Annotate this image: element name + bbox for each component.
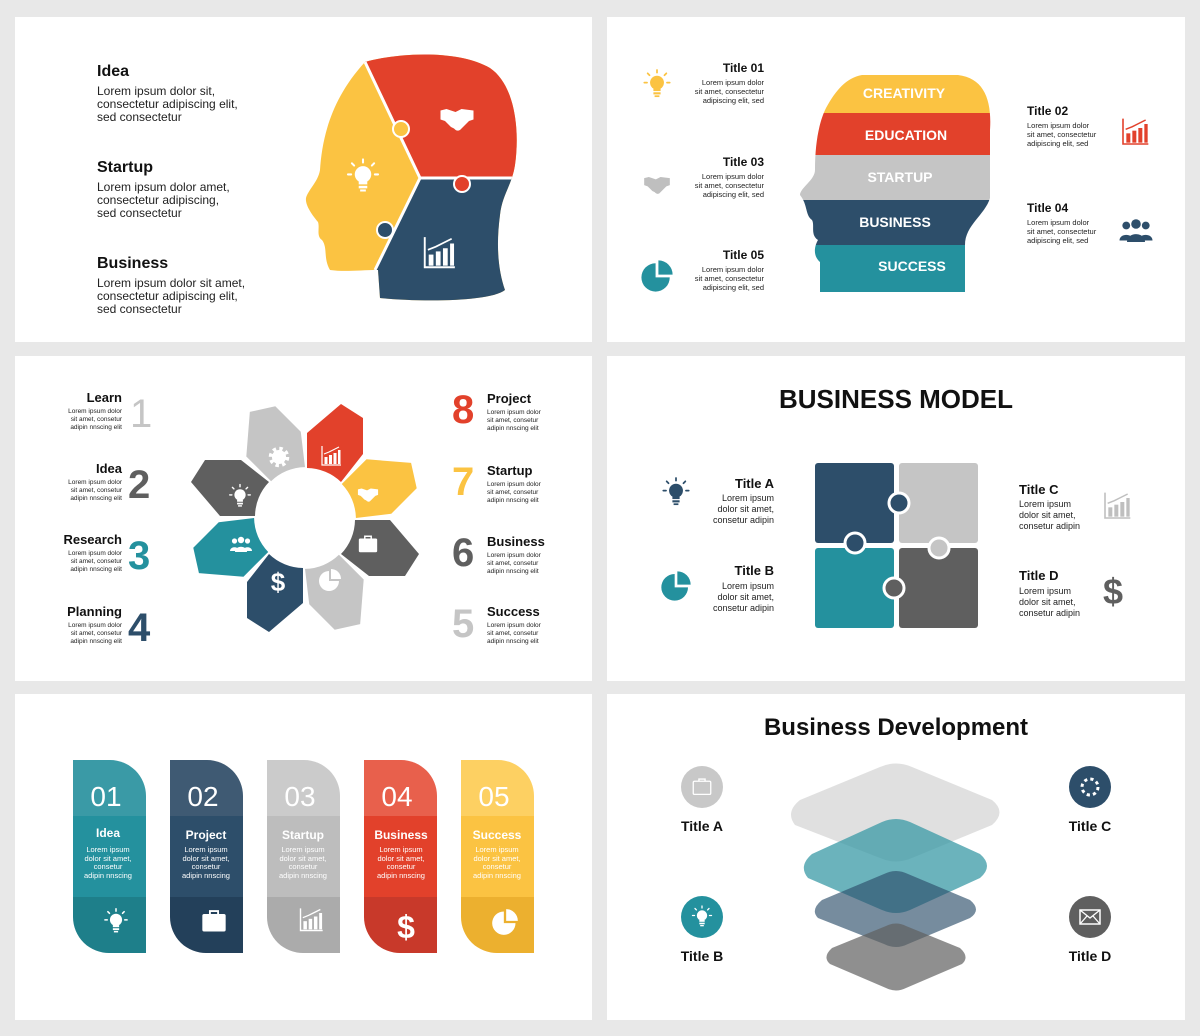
column 04 Business: Business [374, 828, 428, 842]
item: Title 04: adipiscing elit, sed [1027, 236, 1088, 245]
item: Idea 2: Idea [96, 461, 123, 476]
item: Title C: dolor sit amet, [1019, 510, 1076, 520]
item: Title 02: Lorem ipsum dolor [1027, 121, 1090, 130]
item: Research 3: sit amet, consetur [71, 558, 123, 565]
column 04 Business: adipin nnscing [377, 871, 425, 880]
column 03 Startup: adipin nnscing [279, 871, 327, 880]
heading: BUSINESS MODEL: BUSINESS MODEL [779, 384, 1013, 414]
item: Title A: Title A [681, 818, 723, 834]
panel: business development [607, 694, 1185, 1020]
item: Title B [681, 896, 723, 964]
head puzzle graphic [306, 54, 517, 300]
item: Learn 1: 1 [130, 392, 152, 436]
column 04 Business [364, 760, 437, 953]
column 03 Startup: Startup [282, 828, 324, 842]
item: Business 6: Lorem ipsum dolor [487, 552, 542, 559]
head stripes graphic: EDUCATION [865, 127, 947, 143]
item: Research 3: Research [63, 532, 122, 547]
item: Success 5 [452, 602, 542, 646]
icon: chart [425, 237, 455, 267]
column 02 Project: dolor sit amet, [182, 854, 230, 863]
item: Title 05: sit amet, consectetur [695, 274, 764, 283]
panel: gear cycle [15, 356, 592, 681]
item: Title 05: adipiscing elit, sed [703, 283, 764, 292]
layers graphic [791, 764, 1000, 990]
item: Business 6: sit amet, consetur [487, 560, 539, 567]
item: Title B [661, 563, 774, 613]
item: Business 6: adipin nnscing elit [487, 568, 539, 575]
heading: Business Development: Business Development [764, 714, 1028, 741]
item: Research 3: 3 [128, 534, 150, 578]
text block: Idea: consectetur adipiscing elit, [97, 97, 238, 111]
item: Success 5: 5 [452, 602, 474, 646]
item: Success 5: Success [487, 604, 540, 619]
item: Title A: Lorem ipsum [722, 493, 774, 503]
column 02 Project: Lorem ipsum [184, 845, 228, 854]
column 02 Project [170, 760, 243, 953]
item: Title 03 [644, 155, 765, 199]
item: Title 04: Title 04 [1027, 201, 1068, 215]
gear graphic [183, 396, 427, 640]
item: Success 5: Lorem ipsum dolor [487, 622, 542, 629]
item: Planning 4: Planning [67, 604, 122, 619]
column 01 Idea: 01 [90, 781, 122, 812]
text block: Startup: Lorem ipsum dolor amet, [97, 180, 230, 194]
item: Project 8 [452, 388, 542, 432]
column 03 Startup: consetur [289, 862, 318, 871]
item: Learn 1: sit amet, consetur [71, 416, 123, 423]
column 04 Business: dolor sit amet, [377, 854, 425, 863]
column 01 Idea [73, 760, 146, 953]
item: Title 02: sit amet, consectetur [1027, 130, 1097, 139]
item: Idea 2: 2 [128, 463, 150, 507]
item: Project 8: sit amet, consetur [487, 417, 539, 424]
column 01 Idea: adipin nnscing [84, 871, 132, 880]
item: Title A [663, 476, 775, 525]
item: Title A: dolor sit amet, [717, 504, 774, 514]
item: Title 01: sit amet, consectetur [695, 87, 764, 96]
item: Startup 7 [452, 460, 542, 504]
item: Title D: Title D [1019, 568, 1058, 583]
column 01 Idea: dolor sit amet, [84, 854, 132, 863]
icon: handshake [440, 109, 474, 131]
item: Title A: Title A [735, 476, 775, 491]
head stripes graphic: SUCCESS [878, 258, 946, 274]
text block: Idea [97, 63, 238, 124]
item: Title 03: sit amet, consectetur [695, 181, 764, 190]
item: Title 04: Lorem ipsum dolor [1027, 218, 1090, 227]
text block: Idea: sed consectetur [97, 110, 182, 124]
item: Title B: Title B [681, 948, 723, 964]
icon: bulb [348, 159, 378, 192]
item: Success 5: adipin nnscing elit [487, 638, 539, 645]
panel: head stripes [607, 17, 1185, 342]
item: Title 05: Title 05 [723, 248, 764, 262]
item: Startup 7: sit amet, consetur [487, 489, 539, 496]
gear graphic: $ [271, 567, 286, 597]
text block: Startup: consectetur adipiscing, [97, 193, 219, 207]
item: Title A: consetur adipin [713, 515, 774, 525]
item: Title 01: adipiscing elit, sed [703, 96, 764, 105]
column 05 Success: adipin nnscing [473, 871, 521, 880]
item: Learn 1: Learn [87, 390, 122, 405]
column 02 Project: 02 [187, 781, 219, 812]
item: Title 03: adipiscing elit, sed [703, 190, 764, 199]
item: Title 03: Title 03 [723, 155, 764, 169]
text block: Business: Lorem ipsum dolor sit amet, [97, 276, 245, 290]
text block: Startup: sed consectetur [97, 206, 182, 220]
text block: Business: sed consectetur [97, 302, 182, 316]
panel: five columns [15, 694, 592, 1020]
column 03 Startup: 03 [284, 781, 316, 812]
panel: business model [607, 356, 1185, 681]
item: Project 8: Project [487, 391, 532, 406]
item: Title B: consetur adipin [713, 603, 774, 613]
column 03 Startup: dolor sit amet, [279, 854, 327, 863]
item: Title D: consetur adipin [1019, 608, 1080, 618]
column 05 Success: dolor sit amet, [473, 854, 521, 863]
text block: Idea: Idea [97, 63, 129, 80]
item: Title 01: Title 01 [723, 61, 764, 75]
item: Idea 2 [68, 461, 150, 507]
text block: Startup: Startup [97, 159, 153, 176]
item: Idea 2: adipin nnscing elit [70, 495, 122, 502]
item: Learn 1: adipin nnscing elit [70, 424, 122, 431]
item: Title 01 [644, 61, 765, 105]
column 01 Idea: Idea [96, 826, 120, 840]
column 05 Success [461, 760, 534, 953]
item: Title 01: Lorem ipsum dolor [702, 78, 765, 87]
item: Title C: Lorem ipsum [1019, 499, 1071, 509]
text block: Startup [97, 159, 230, 220]
item: Business 6: Business [487, 534, 545, 549]
item: Startup 7: adipin nnscing elit [487, 497, 539, 504]
item: Learn 1: Lorem ipsum dolor [68, 408, 123, 415]
item: Project 8: 8 [452, 388, 474, 432]
item: Title C: Title C [1019, 482, 1059, 497]
item: Idea 2: Lorem ipsum dolor [68, 479, 123, 486]
item: Idea 2: sit amet, consetur [71, 487, 123, 494]
item: Planning 4: 4 [128, 606, 151, 650]
item: Project 8: Lorem ipsum dolor [487, 409, 542, 416]
column 02 Project: Project [186, 828, 226, 842]
item: Research 3: Lorem ipsum dolor [68, 550, 123, 557]
item: Title A [681, 766, 723, 834]
item: Title B: Lorem ipsum [722, 581, 774, 591]
item: Research 3: adipin nnscing elit [70, 566, 122, 573]
text block: Business [97, 255, 245, 316]
item: Research 3 [63, 532, 150, 578]
item: Title 04: sit amet, consectetur [1027, 227, 1097, 236]
item: Title C [1069, 766, 1111, 834]
column 02 Project: adipin nnscing [182, 871, 230, 880]
item: Planning 4 [67, 604, 151, 650]
column 01 Idea: Lorem ipsum [86, 845, 130, 854]
item: Title C: Title C [1069, 818, 1111, 834]
item: Success 5: sit amet, consetur [487, 630, 539, 637]
item: Title 04 [1027, 201, 1152, 245]
column 05 Success: Success [473, 828, 522, 842]
column 01 Idea: consetur [94, 862, 123, 871]
item: Planning 4: sit amet, consetur [71, 630, 123, 637]
column 04 Business: consetur [387, 862, 416, 871]
item: Planning 4: adipin nnscing elit [70, 638, 122, 645]
column 04 Business: $ [397, 909, 415, 945]
item: Business 6 [452, 531, 545, 575]
item: Title C [1019, 482, 1130, 531]
item: Project 8: adipin nnscing elit [487, 425, 539, 432]
item: Title D: dolor sit amet, [1019, 597, 1076, 607]
item: Title 05 [641, 248, 765, 292]
item: Title B: Title B [734, 563, 774, 578]
head stripes graphic: STARTUP [867, 169, 933, 185]
item: Title B: dolor sit amet, [717, 592, 774, 602]
item: Startup 7: 7 [452, 460, 474, 504]
head stripes graphic: BUSINESS [859, 214, 931, 230]
text block: Idea: Lorem ipsum dolor sit, [97, 84, 215, 98]
item: Title D [1069, 896, 1111, 964]
item: Title D: Lorem ipsum [1019, 586, 1071, 596]
item: Learn 1 [68, 390, 152, 436]
column 04 Business: Lorem ipsum [379, 845, 423, 854]
column 05 Success: Lorem ipsum [475, 845, 519, 854]
item: Business 6: 6 [452, 531, 474, 575]
text block: Business: Business [97, 255, 168, 272]
item: Startup 7: Lorem ipsum dolor [487, 481, 542, 488]
column 05 Success: 05 [478, 781, 510, 812]
item: Title 02: Title 02 [1027, 104, 1068, 118]
item: Title 02: adipiscing elit, sed [1027, 139, 1088, 148]
puzzle graphic [815, 463, 978, 628]
column 05 Success: consetur [483, 862, 512, 871]
item: Startup 7: Startup [487, 463, 533, 478]
column 02 Project: consetur [192, 862, 221, 871]
head stripes graphic [795, 70, 995, 295]
column 04 Business: 04 [381, 781, 413, 812]
column 03 Startup [267, 760, 340, 953]
item: Title D [1019, 568, 1123, 618]
column 03 Startup: Lorem ipsum [281, 845, 325, 854]
text block: Business: consectetur adipiscing elit, [97, 289, 238, 303]
item: Title D: Title D [1069, 948, 1111, 964]
item: Title 02 [1027, 104, 1148, 148]
item: Title 03: Lorem ipsum dolor [702, 172, 765, 181]
item: Planning 4: Lorem ipsum dolor [68, 622, 123, 629]
item: Title D: $ [1103, 571, 1123, 612]
item: Title 05: Lorem ipsum dolor [702, 265, 765, 274]
head stripes graphic: CREATIVITY [863, 85, 946, 101]
panel: head puzzle [15, 17, 592, 342]
item: Title C: consetur adipin [1019, 521, 1080, 531]
